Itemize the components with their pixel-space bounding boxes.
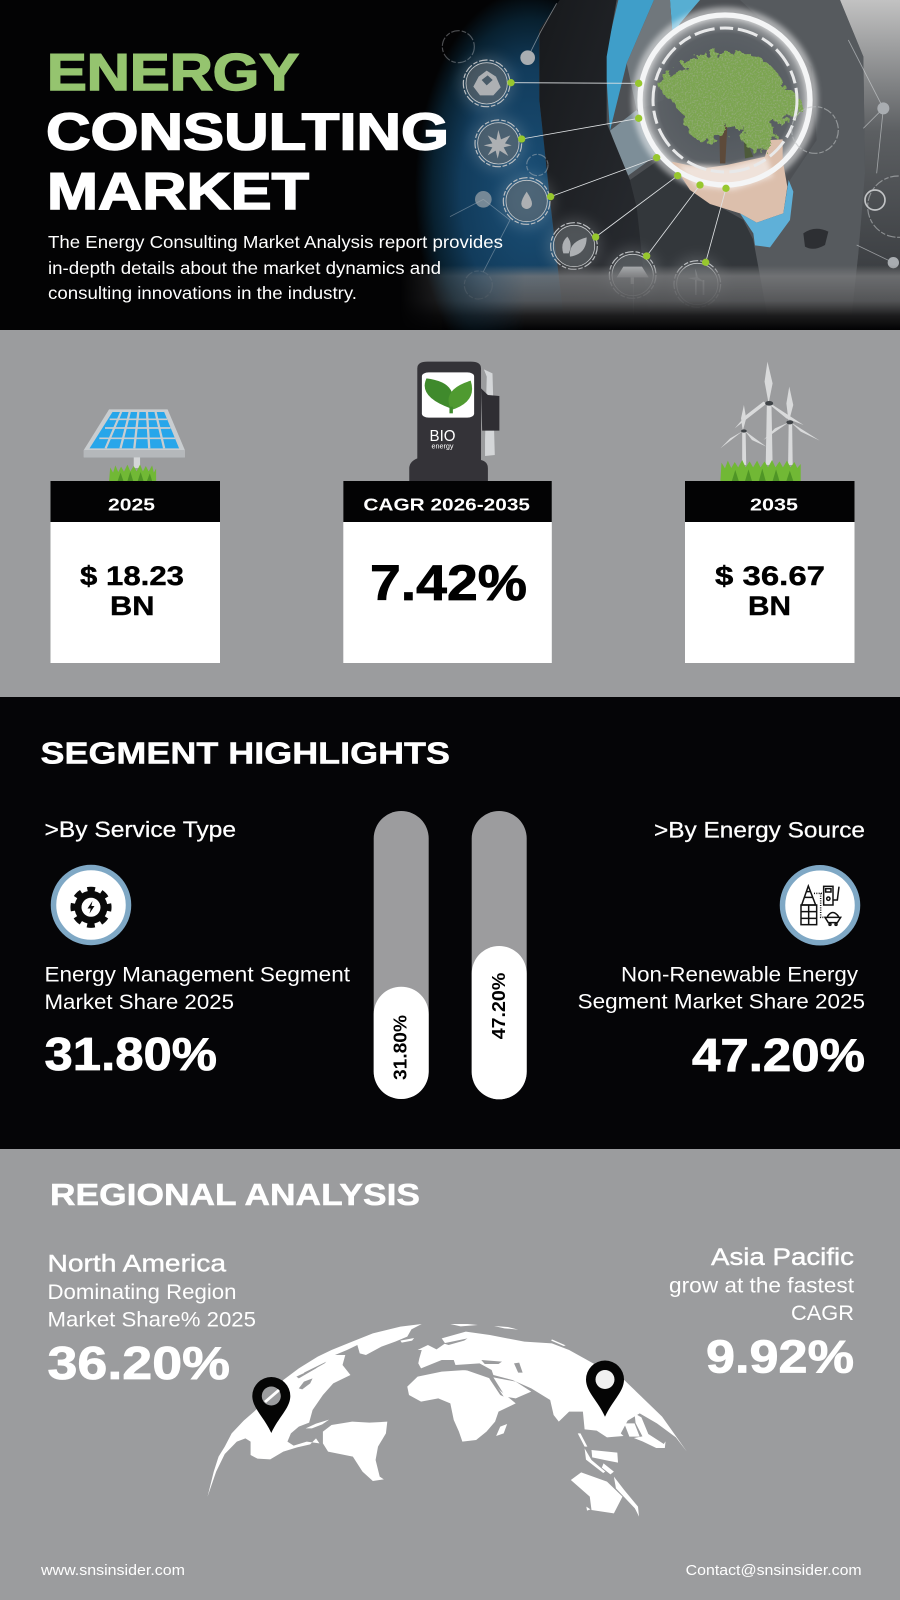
icon: location pin north america [252, 1377, 290, 1433]
card: 2035: BN [748, 591, 791, 621]
title: MARKET [47, 163, 309, 221]
icon: location pin asia pacific [586, 1360, 624, 1417]
network nodes [475, 50, 899, 268]
islands [306, 1324, 666, 1517]
card: 2025: $ 18.23 [80, 561, 184, 591]
intro paragraph [48, 232, 503, 303]
icon: oil derrick, fuel pump and coal cart [782, 868, 858, 943]
block: by service type [44, 817, 350, 1080]
bar: energy source share: 47.20% [489, 973, 509, 1039]
icon halos [455, 52, 722, 274]
block: north america: Market Share% 2025 [48, 1309, 256, 1332]
card: 2025: 2025 [108, 495, 155, 515]
north america and greenland [208, 1324, 422, 1497]
left jacket panel [539, 0, 642, 280]
panel: regional analysis [0, 1149, 900, 1600]
intro paragraph: in-depth details about the market dynamics and [48, 258, 441, 278]
card: 2035: $ 36.67 [715, 561, 825, 591]
block: by energy source: >By Energy Source [654, 818, 865, 842]
arabia [493, 1377, 531, 1398]
intro paragraph: The Energy Consulting Market Analysis report provides [48, 232, 503, 252]
world map [208, 1324, 687, 1517]
eurasia [418, 1332, 687, 1452]
block: asia pacific: 9.92% [706, 1331, 854, 1383]
icon: bio energy pump: energy [432, 444, 454, 450]
africa [407, 1370, 516, 1442]
card: CAGR 2026-2035 [343, 481, 552, 663]
inland waters [296, 1338, 523, 1397]
icon: wind turbines [720, 362, 820, 481]
card: 2025 [50, 481, 220, 663]
block: by energy source: 47.20% [692, 1029, 865, 1081]
block: by service type: Market Share 2025 [44, 991, 234, 1014]
ring [640, 15, 810, 185]
icon: bio energy pump: BIO [430, 428, 456, 445]
icon: solar panel [84, 409, 185, 481]
bar: service type share: 31.80% [390, 1015, 410, 1080]
glass globe [642, 18, 808, 168]
block: north america [48, 1251, 256, 1389]
block: north america: North America [48, 1251, 227, 1278]
block: asia pacific: CAGR [791, 1302, 854, 1325]
icon circles [466, 63, 718, 305]
block: by service type: >By Service Type [44, 817, 236, 842]
panel: segment highlights [0, 697, 900, 1149]
block: north america: 36.20% [48, 1337, 230, 1389]
footer: contact: Contact@snsinsider.com [686, 1562, 862, 1579]
block: asia pacific: grow at the fastest [669, 1275, 854, 1298]
block: by service type: 31.80% [44, 1028, 217, 1080]
title: ENERGY [47, 44, 299, 102]
block: by energy source [578, 818, 865, 1081]
block: by energy source: Segment Market Share 2025 [578, 990, 865, 1014]
block: by service type: Energy Management Segment [44, 964, 350, 987]
icon: bio energy pump [409, 362, 499, 481]
card: 2035 [685, 481, 854, 663]
card: CAGR 2026-2035: CAGR 2026-2035 [363, 495, 530, 515]
block: asia pacific: Asia Pacific [711, 1244, 854, 1271]
panel: hero background [0, 0, 900, 330]
green connector dots [507, 79, 730, 266]
australia [571, 1472, 622, 1513]
block: by energy source: Non-Renewable Energy [621, 964, 859, 987]
bar: service type share [374, 811, 429, 1099]
hand [672, 139, 787, 223]
icon: gear with lightning bolt [54, 868, 128, 942]
card: CAGR 2026-2035: 7.42% [370, 555, 527, 611]
heading: regional analysis: REGIONAL ANALYSIS [50, 1178, 420, 1212]
madagascar [496, 1424, 507, 1436]
block: north america: Dominating Region [48, 1281, 236, 1304]
icon glyphs [473, 71, 885, 295]
footer: website: www.snsinsider.com [40, 1562, 185, 1579]
title [46, 44, 449, 221]
hero photo: consultant holding glowing tree [412, 0, 900, 330]
card: 2035: 2035 [750, 495, 798, 515]
intro paragraph: consulting innovations in the industry. [48, 283, 357, 303]
tree [719, 125, 727, 163]
south america [323, 1422, 387, 1481]
panel: key metrics [0, 330, 900, 697]
network lines [450, 3, 893, 330]
heading: segment highlights: SEGMENT HIGHLIGHTS [40, 736, 450, 770]
card: 2025: BN [110, 591, 154, 621]
title: CONSULTING [46, 104, 449, 162]
block: asia pacific [669, 1244, 854, 1383]
bar: energy source share [472, 811, 527, 1099]
